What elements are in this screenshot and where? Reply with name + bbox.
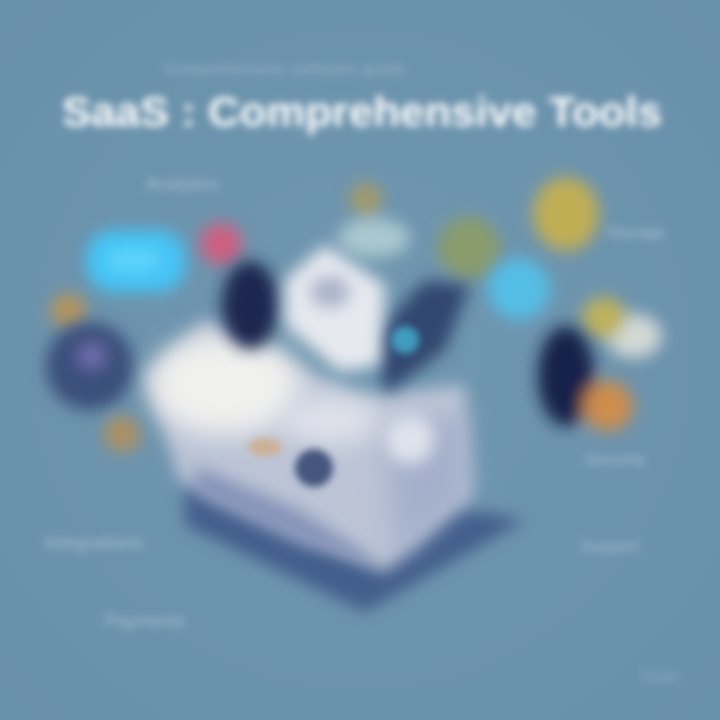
label: top left: Analytics	[146, 174, 218, 194]
label: mid right: Security	[584, 450, 646, 469]
orange accent	[248, 438, 282, 456]
icon: cyan circle	[488, 258, 550, 320]
icon: blue chat bubble	[86, 230, 186, 292]
label: lower left: Integrations	[44, 533, 144, 554]
dark tower left	[222, 261, 278, 349]
title: SaaS : Comprehensive Tools	[62, 88, 662, 135]
icon: person top	[338, 183, 410, 258]
label: top right: Storage	[606, 223, 666, 242]
body centre highlight	[280, 396, 380, 444]
body highlight	[150, 335, 300, 435]
icon: red circle	[200, 223, 242, 265]
lower shade	[195, 465, 385, 565]
icon: dark purple circle	[46, 322, 134, 410]
label: bottom right: Tools	[641, 669, 679, 686]
white top inner shade	[310, 276, 350, 308]
main body	[145, 320, 470, 572]
dark tower right	[375, 280, 470, 395]
icon: yellow white pill	[582, 297, 662, 358]
icon: olive circle	[438, 217, 500, 279]
icon: orange dot left	[50, 293, 86, 329]
icon: dark oval and orange circle	[538, 326, 633, 431]
icon: yellow circle	[533, 177, 599, 251]
panel highlight	[386, 416, 434, 464]
shadow base	[185, 465, 525, 612]
cyan accent	[391, 326, 419, 354]
icon: orange dot lower left	[104, 416, 140, 452]
label: lower right: Support	[580, 537, 640, 556]
dark knob	[295, 449, 333, 487]
label: bottom left: Payments	[105, 611, 185, 631]
body shaded right	[385, 410, 470, 560]
subtitle: Comprehensive software guide	[165, 61, 405, 78]
white top module	[285, 245, 385, 372]
isometric server illustration	[145, 245, 525, 612]
